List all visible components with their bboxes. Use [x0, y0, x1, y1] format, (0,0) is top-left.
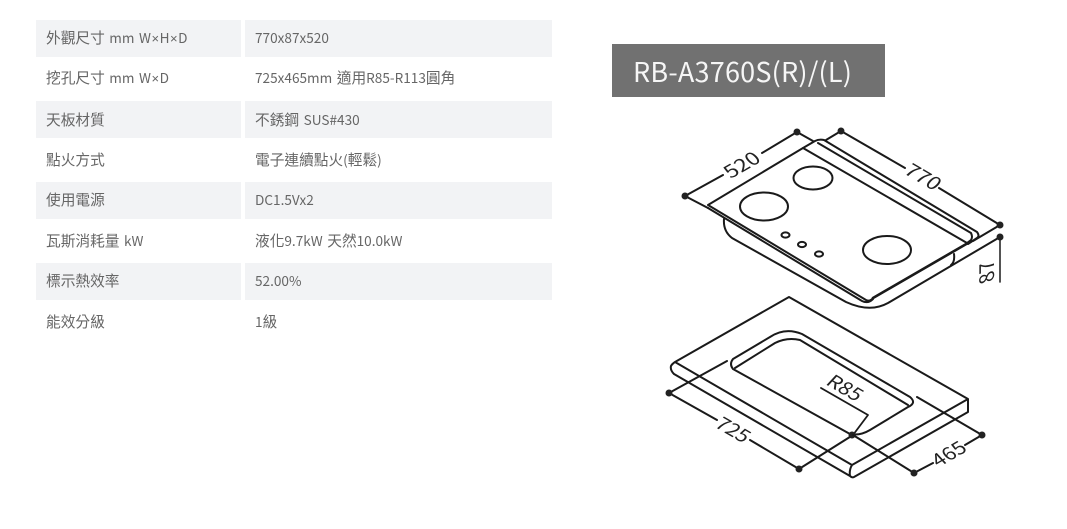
dimension: 770 width: 770 [899, 156, 949, 195]
hob front-right thick edge [873, 243, 968, 298]
row: gas consumption [46, 230, 402, 251]
row: power source: 使用電源 [46, 189, 105, 210]
hob top plate [708, 148, 968, 302]
row: thermal efficiency: 標示熱效率 [46, 270, 119, 291]
dimension: 465 depth [853, 397, 986, 476]
cutout outer edge [731, 331, 913, 434]
row: energy efficiency grade [46, 311, 277, 332]
row: cutout dimensions: 725x465mm 適用R85-R113圓角 [255, 67, 455, 88]
row: thermal efficiency [36, 263, 552, 300]
row: ignition method [46, 149, 382, 170]
dimension: 87 height [971, 234, 1004, 290]
model number banner: RB-A3760S(R)/(L) [633, 51, 852, 90]
dimension: 520 depth [682, 128, 813, 208]
R85 radius label: R85 [821, 368, 871, 406]
countertop slab [671, 297, 968, 477]
row: ignition method: 點火方式 [46, 149, 105, 170]
row: top plate material: 不銹鋼 SUS#430 [255, 109, 360, 130]
dimension: 87 height: 87 [971, 256, 1000, 290]
burner: rear small [794, 166, 832, 190]
row: cutout dimensions: 挖孔尺寸 mm W×D [46, 67, 169, 88]
diagram: gas hob with dimensions [682, 128, 1004, 308]
row: top plate material [36, 101, 552, 138]
row: outer dimensions: 770x87x520 [255, 27, 329, 47]
control knobs [782, 232, 823, 257]
dimension: 770 width [826, 128, 1004, 241]
burner: right large [863, 236, 911, 264]
row: power source: DC1.5Vx2 [255, 189, 314, 209]
row: outer dimensions: 外觀尺寸 mm W×H×D [46, 27, 187, 48]
specification table [36, 20, 552, 332]
row: gas consumption: 瓦斯消耗量 kW [46, 230, 143, 251]
model number banner [612, 44, 885, 97]
row: power source [36, 182, 552, 219]
hob rear raised bar [803, 140, 978, 244]
dimension: 465 depth: 465 [924, 434, 972, 472]
diagram: countertop cutout with dimensions [666, 297, 986, 477]
row: cutout dimensions [46, 67, 455, 88]
cutout inner edge [735, 339, 908, 405]
row: gas consumption: 液化9.7kW 天然10.0kW [255, 230, 402, 251]
dimension: 520 depth: 520 [716, 144, 766, 183]
hob lower body [724, 219, 1000, 308]
row: energy efficiency grade: 能效分級 [46, 311, 105, 332]
burner: left large [740, 192, 788, 220]
row: ignition method: 電子連續點火(輕鬆) [255, 149, 382, 170]
row: outer dimensions [36, 20, 552, 57]
dimension: 725 width [666, 361, 856, 472]
row: thermal efficiency: 52.00% [255, 270, 301, 290]
row: top plate material: 天板材質 [46, 109, 105, 130]
row: energy efficiency grade: 1級 [255, 311, 277, 332]
R85 radius label [821, 368, 871, 435]
dimension: 725 width: 725 [710, 410, 758, 448]
